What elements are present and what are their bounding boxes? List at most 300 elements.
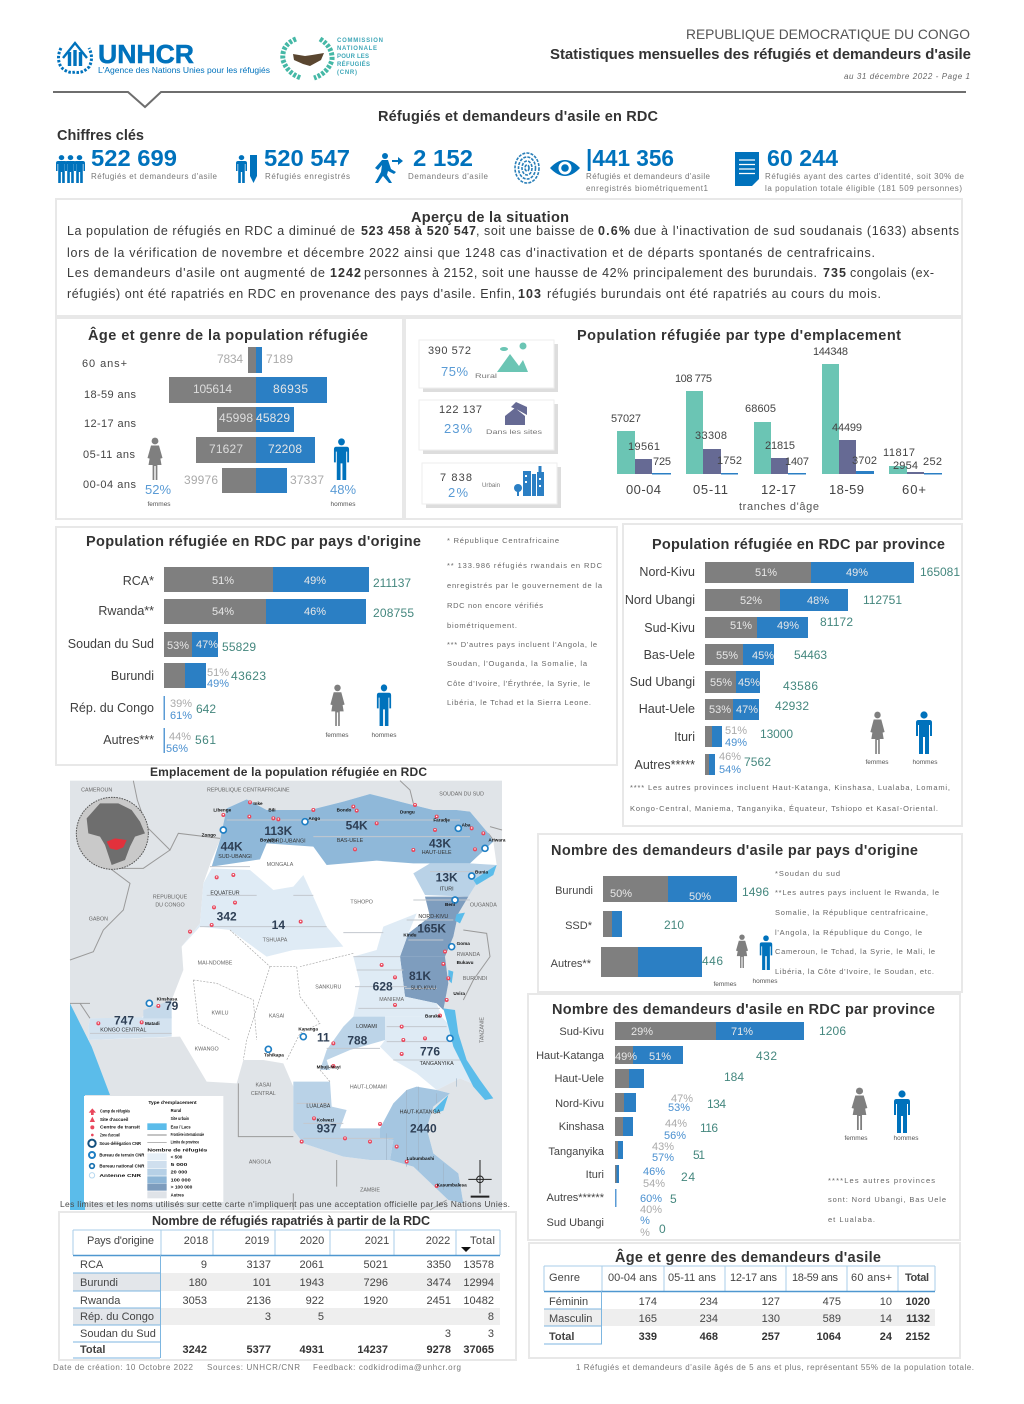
table: asylum seekers: Féminin bbox=[549, 1296, 588, 1308]
chart: origin bars: Autres*** bbox=[103, 733, 154, 747]
table: repatriations: 3474 bbox=[427, 1277, 451, 1289]
refugee count labels: 165K bbox=[417, 921, 446, 935]
text block: asylum origin notes: Somalie, la République centrafricaine, bbox=[775, 908, 928, 917]
provinces: Haut-Katanga bbox=[380, 1087, 463, 1203]
kpi: asylum seekers: Demandeurs d'asile bbox=[408, 172, 489, 181]
card: sites bbox=[419, 400, 558, 454]
kpi: identity cards: 60 244 bbox=[767, 145, 838, 171]
card: rural: 75% bbox=[441, 364, 468, 379]
logo: UNHCR: L'Agence des Nations Unies pour les réfugiés bbox=[98, 66, 270, 75]
text block: origin notes: Soudan, l'Ouganda, la Somalie, la bbox=[447, 659, 588, 668]
chart: province bars: 13000 bbox=[760, 727, 793, 741]
kpi: identity cards bbox=[735, 145, 965, 193]
chart: clustered bars by age: 11817 bbox=[883, 447, 915, 459]
chart: asylum origin bars bbox=[551, 876, 769, 977]
kpi: asylum seekers bbox=[375, 145, 489, 183]
icon: women bbox=[148, 438, 162, 480]
heading: map title: Emplacement de la population réfugiée en RDC bbox=[150, 765, 427, 779]
town name labels: Libenge bbox=[213, 808, 232, 813]
text block: origin notes bbox=[447, 536, 603, 707]
table: asylum seekers: 589 bbox=[823, 1313, 841, 1325]
text block: situation paragraph: 0.6% bbox=[598, 224, 630, 238]
country and province labels: KASAI bbox=[255, 1083, 271, 1089]
table: repatriations: 8 bbox=[488, 1311, 494, 1323]
chart: population pyramid: 71627 bbox=[209, 442, 243, 456]
chart: asylum origin bars: 50% bbox=[610, 888, 632, 900]
country and province labels: LUALABA bbox=[306, 1103, 331, 1109]
table: asylum seekers: Genre bbox=[549, 1272, 580, 1284]
provinces: Maniema and north Tanganyika bbox=[353, 957, 442, 1017]
table: asylum seekers: 14 bbox=[880, 1313, 892, 1325]
provinces: Lualaba bbox=[293, 1082, 393, 1160]
map legend: Bureau de terrain CNR bbox=[99, 1153, 145, 1159]
chart: origin bars: 43623 bbox=[231, 669, 266, 683]
text block: asylum origin notes: **Les autres pays incluent le Rwanda, le bbox=[775, 888, 939, 897]
country and province labels: TANZANIE bbox=[479, 1017, 485, 1043]
icon: women: femmes bbox=[865, 759, 889, 766]
chart: clustered bars by age: 2954 bbox=[893, 460, 918, 472]
chart: province bars: 49% bbox=[846, 567, 868, 579]
chart: origin bars: 39% bbox=[170, 698, 192, 710]
chart: province bars: 51% bbox=[725, 725, 747, 737]
chart: province bars: Nord Ubangi bbox=[625, 593, 695, 607]
chart: clustered bars by age: 12-17 bbox=[761, 482, 796, 497]
chart: asylum province bars: % bbox=[640, 1215, 650, 1227]
text block: asylum province notes: et Lualaba. bbox=[828, 1215, 875, 1224]
chart: asylum province bars: Sud-Kivu bbox=[559, 1026, 604, 1038]
table: asylum seekers: 234 bbox=[700, 1313, 718, 1325]
table: asylum seekers: 127 bbox=[762, 1296, 780, 1308]
chart: clustered bars by age: 108 775 bbox=[675, 373, 712, 385]
table: repatriations: 4931 bbox=[300, 1344, 324, 1356]
logo: CNR commission nationale pour les réfugiés: POUR LES bbox=[337, 54, 369, 60]
chart: asylum province bars: Haut-Katanga bbox=[536, 1050, 605, 1062]
map legend: Zone d'accueil bbox=[100, 1132, 120, 1138]
text block: province notes: Kongo-Central, Maniema, Tanganyika, Équateur, Tshiopo et Kasaï-Oriental. bbox=[630, 804, 938, 813]
chart: province bars: 45% bbox=[752, 650, 774, 662]
chart: asylum province bars: 1206 bbox=[819, 1024, 846, 1038]
chart: clustered bars by age: 3702 bbox=[852, 455, 877, 467]
chart: asylum province bars: 46% bbox=[643, 1166, 665, 1178]
town name labels: Lubumbashi bbox=[407, 1156, 434, 1161]
icon: fingerprint and eye bbox=[515, 153, 580, 183]
chart: asylum origin bars: 1496 bbox=[742, 885, 769, 899]
country and province labels: CENTRAL bbox=[251, 1091, 276, 1097]
text block: asylum province notes: ****Les autres provinces bbox=[828, 1176, 935, 1185]
table: repatriations: 5377 bbox=[247, 1344, 271, 1356]
inset globe bbox=[76, 797, 148, 869]
country and province labels: MAI-NDOMBE bbox=[198, 961, 233, 967]
text block: origin notes: Côte d'Ivoire, l'Érythrée, la Syrie, le bbox=[447, 679, 590, 688]
compass and scale bbox=[468, 1160, 492, 1197]
icon: women: femmes bbox=[713, 981, 737, 988]
chart: asylum province bars: 29% bbox=[631, 1026, 653, 1038]
panel: asylum seekers by country of origin bbox=[538, 834, 962, 992]
table: repatriations: 2022 bbox=[426, 1235, 450, 1247]
country and province labels: SOUDAN DU SUD bbox=[439, 791, 484, 797]
chart: origin bars: 561 bbox=[195, 733, 216, 747]
town name labels: Kinshasa bbox=[157, 997, 178, 1002]
map legend: Sous-délégation CNR bbox=[99, 1141, 141, 1147]
chart: province bars: 51% bbox=[755, 567, 777, 579]
text block: asylum origin notes: l'Angola, la République du Congo, le bbox=[775, 928, 922, 937]
chart: origin bars: 61% bbox=[170, 710, 192, 722]
table: asylum seekers: 1132 bbox=[906, 1313, 930, 1325]
country and province labels: KONGO CENTRAL bbox=[100, 1028, 146, 1034]
map legend: Type d'emplacement bbox=[148, 1100, 197, 1106]
table: repatriations: Rép. du Congo bbox=[80, 1311, 154, 1323]
icon: women: femmes bbox=[844, 1135, 868, 1142]
refugee count labels: 747 bbox=[114, 1014, 134, 1028]
chart: clustered bars by age: 725 bbox=[653, 456, 671, 468]
chart: asylum province bars: 40% bbox=[640, 1204, 662, 1216]
kpi: registered refugees bbox=[236, 145, 350, 183]
kpi: identity cards: la population totale éligible (181 509 personnes) bbox=[765, 184, 962, 193]
town name labels: Mbuji-Mayi bbox=[317, 1064, 341, 1069]
table: repatriations: 2451 bbox=[427, 1295, 451, 1307]
country and province labels: TANGANYIKA bbox=[420, 1061, 454, 1067]
men share: hommes bbox=[331, 501, 356, 508]
heading: Population réfugiée par type d'emplacement bbox=[577, 328, 901, 344]
table: asylum seekers: 165 bbox=[639, 1313, 657, 1325]
kpi: refugees and asylum seekers: Réfugiés et demandeurs d'asile bbox=[91, 172, 218, 181]
town name labels: Boyabu bbox=[260, 838, 277, 843]
table: asylum seekers bbox=[544, 1266, 935, 1344]
text block: asylum province notes bbox=[828, 1176, 946, 1224]
chart: origin bars: 642 bbox=[196, 702, 216, 716]
heading: Âge et genre des demandeurs d'asile bbox=[615, 1248, 881, 1266]
text block: origin notes: biométriquement. bbox=[447, 621, 517, 630]
logo: CNR commission nationale pour les réfugiés: RÉFUGIÉS bbox=[337, 60, 370, 68]
table: asylum seekers: 475 bbox=[823, 1296, 841, 1308]
text block: province notes: **** Les autres provinces incluent Haut-Katanga, Kinshasa, Lualaba, Lomami, bbox=[630, 783, 950, 792]
town name labels: Kindu bbox=[403, 933, 417, 938]
men share bbox=[330, 482, 356, 508]
kpi: biometrically registered bbox=[515, 145, 711, 193]
table: repatriations: 3242 bbox=[183, 1344, 207, 1356]
provinces: Kinshasa bbox=[143, 1000, 172, 1018]
refugee count labels: 13K bbox=[436, 870, 458, 884]
table: repatriations: 12994 bbox=[463, 1277, 494, 1289]
chart: clustered bars by age: 33308 bbox=[695, 430, 727, 442]
map legend: Bureau national CNR bbox=[99, 1164, 145, 1170]
refugee count labels: 44K bbox=[221, 840, 243, 854]
chart: province bars: 55% bbox=[710, 677, 732, 689]
heading: Nombre de réfugiés rapatriés à partir de la RDC bbox=[152, 1214, 430, 1228]
table: repatriations: 5021 bbox=[364, 1259, 388, 1271]
panel: repatriated refugees bbox=[59, 1212, 516, 1360]
text block: asylum origin notes bbox=[775, 869, 939, 976]
chart: asylum origin bars: 446 bbox=[702, 954, 723, 968]
horizontal stripe artefacts bbox=[90, 820, 477, 1138]
country and province labels bbox=[81, 787, 497, 1194]
chart: origin bars: 56% bbox=[166, 743, 188, 755]
footer: credits: Sources: UNHCR/CNR bbox=[207, 1363, 300, 1372]
table: repatriations: 3 bbox=[265, 1311, 271, 1323]
icon: three people bbox=[56, 155, 85, 183]
men share: 48% bbox=[330, 482, 356, 497]
chart: asylum province bars: % bbox=[640, 1227, 650, 1239]
text block: asylum origin notes: Cameroun, le Tchad, la Syrie, le Mali, le bbox=[775, 947, 935, 956]
chart: province bars: Ituri bbox=[674, 730, 695, 744]
text block: origin notes: Libéria, le Tchad et la Sierra Leone. bbox=[447, 698, 591, 707]
DRC base land bbox=[88, 794, 497, 1203]
kpi: biometrically registered: |441 356 bbox=[586, 145, 674, 171]
icon: women bbox=[865, 712, 889, 766]
panel: refugees by country of origin bbox=[56, 527, 617, 765]
table: asylum seekers: 1020 bbox=[906, 1296, 930, 1308]
provinces: Sud-Kivu bbox=[400, 957, 448, 1010]
town name labels: Bili bbox=[268, 808, 276, 813]
chart: province bars: Haut-Uele bbox=[639, 702, 695, 716]
chart: province bars: 54463 bbox=[794, 648, 827, 662]
chart: population pyramid: 18-59 ans bbox=[84, 389, 136, 401]
town name labels: Zongo bbox=[202, 833, 216, 838]
refugee count labels: 113K bbox=[264, 824, 293, 838]
chart: province bars: 81172 bbox=[820, 615, 853, 629]
chart: province bars: 46% bbox=[719, 751, 741, 763]
table: repatriations bbox=[73, 1230, 500, 1358]
heading: Population réfugiée en RDC par pays d'origine bbox=[86, 534, 421, 550]
kpi: refugees and asylum seekers: 522 699 bbox=[91, 145, 177, 171]
chart: asylum province bars: 53% bbox=[668, 1102, 690, 1114]
chart: province bars: 49% bbox=[725, 737, 747, 749]
logo: UNHCR bbox=[58, 39, 270, 75]
chart: asylum province bars: Tanganyika bbox=[548, 1146, 605, 1158]
table: asylum seekers: 24 bbox=[880, 1331, 893, 1343]
map: refugee locations in DRC bbox=[70, 781, 506, 1210]
refugee count labels: 342 bbox=[217, 910, 237, 924]
refugee count labels: 43K bbox=[429, 836, 451, 850]
table: repatriations: 37065 bbox=[463, 1344, 494, 1356]
table: repatriations: Burundi bbox=[80, 1277, 118, 1289]
country and province labels: HAUT-UELE bbox=[422, 850, 452, 856]
icon: men bbox=[913, 711, 938, 766]
provinces: Tanganyika bbox=[380, 1017, 480, 1090]
chart: asylum province bars: 134 bbox=[707, 1097, 726, 1111]
country and province labels: ANGOLA bbox=[249, 1159, 272, 1165]
provinces: Lomami bbox=[320, 1017, 385, 1070]
card: urban: 2% bbox=[448, 485, 468, 500]
chart: origin bars: 46% bbox=[304, 606, 326, 618]
map legend: Site d'accueil bbox=[100, 1117, 129, 1123]
town name labels bbox=[145, 801, 506, 1188]
chart: clustered bars by age: 144348 bbox=[813, 346, 848, 358]
text block: asylum province notes: sont: Nord Ubangi, Bas Uele bbox=[828, 1195, 946, 1204]
country and province labels: REPUBLIQUE bbox=[153, 894, 188, 900]
map legend: Nombre de réfugiés bbox=[147, 1148, 208, 1154]
chart: clustered bars by age: 252 bbox=[923, 456, 942, 468]
chart: asylum province bars: Haut-Uele bbox=[554, 1073, 604, 1085]
country and province labels: KWILU bbox=[212, 1011, 229, 1017]
chart: clustered bars by age: 44499 bbox=[832, 422, 862, 434]
report title block: REPUBLIQUE DEMOCRATIQUE DU CONGO bbox=[686, 26, 970, 42]
country and province labels: GABON bbox=[89, 917, 108, 923]
map legend: 100 000 bbox=[171, 1177, 191, 1183]
card: rural: 390 572 bbox=[428, 345, 471, 357]
town name labels: Ariwara bbox=[488, 838, 506, 843]
text block: situation paragraph: 523 458 à 520 547 bbox=[361, 224, 476, 238]
chart: province bars: 42932 bbox=[775, 699, 809, 713]
chart: asylum origin bars: SSD* bbox=[565, 920, 593, 932]
chart: asylum province bars: Kinshasa bbox=[559, 1121, 605, 1133]
chart: asylum province bars: 51 bbox=[693, 1148, 705, 1162]
refugee location markers bbox=[96, 800, 488, 1188]
panel: asylum seekers by province bbox=[528, 994, 960, 1240]
table: repatriations: 922 bbox=[306, 1295, 324, 1307]
chart: asylum province bars bbox=[536, 1022, 846, 1239]
card: rural: Rural bbox=[475, 373, 498, 380]
icon: houses bbox=[505, 402, 527, 425]
table: asylum seekers: 468 bbox=[700, 1331, 718, 1343]
table: asylum seekers: 257 bbox=[762, 1331, 780, 1343]
town name labels: Kolwezi bbox=[317, 1118, 334, 1123]
text block: situation paragraph: due à l'inactivation de sud soudanais (1633) absents bbox=[634, 224, 959, 238]
chart: origin bars: Soudan du Sud bbox=[68, 637, 154, 651]
icon: mountains bbox=[497, 342, 528, 372]
text block: situation paragraph: personnes à 2152, soit une hausse de 42% principalement des burundais. bbox=[364, 266, 817, 280]
panel: age and gender of asylum seekers bbox=[529, 1243, 960, 1358]
table: repatriations: Total bbox=[80, 1344, 105, 1356]
card: sites: 23% bbox=[444, 421, 472, 436]
kpi: refugees and asylum seekers bbox=[56, 145, 218, 183]
chart: clustered bars by age: 21815 bbox=[765, 440, 795, 452]
country and province labels: RWANDA bbox=[457, 952, 480, 958]
icon: men: hommes bbox=[913, 759, 938, 766]
chart: asylum province bars: 432 bbox=[756, 1049, 777, 1063]
provinces: northwest light bbox=[182, 868, 343, 957]
table: asylum seekers: 234 bbox=[700, 1296, 718, 1308]
provinces: Kongo Central bbox=[88, 1017, 172, 1040]
text block: situation paragraph: congolais (ex- bbox=[850, 266, 934, 280]
chart: clustered bars by age: 19561 bbox=[628, 441, 660, 453]
table: asylum seekers: Total bbox=[905, 1272, 929, 1284]
country and province labels: MANIEMA bbox=[379, 997, 405, 1003]
map legend: Autres bbox=[171, 1192, 184, 1198]
chart: clustered bars by age: 1407 bbox=[785, 456, 809, 468]
country and province labels: DU CONGO bbox=[155, 903, 185, 909]
text block: situation paragraph: La population de réfugiés en RDC a diminué de bbox=[67, 224, 355, 238]
map legend: Centre de transit bbox=[100, 1125, 140, 1131]
chart: population pyramid: 05-11 ans bbox=[83, 449, 136, 461]
chart: origin bars bbox=[68, 567, 414, 755]
table: repatriations: 101 bbox=[253, 1277, 271, 1289]
table: repatriations: 3350 bbox=[427, 1259, 451, 1271]
table: asylum seekers: 130 bbox=[762, 1313, 780, 1325]
table: asylum seekers: 12-17 ans bbox=[730, 1272, 778, 1284]
chart: province bars: Autres***** bbox=[635, 758, 695, 772]
country and province labels: NORD-KIVU bbox=[418, 914, 448, 920]
country and province labels: MONGALA bbox=[267, 862, 294, 868]
chart: province bars: Bas-Uele bbox=[644, 648, 695, 662]
map legend: Limite de province bbox=[171, 1139, 199, 1145]
country and province labels: CAMEROUN bbox=[81, 787, 112, 793]
icon: men bbox=[334, 438, 349, 480]
text block: situation paragraph: Les demandeurs d'asile ont augmenté de bbox=[67, 266, 325, 280]
country and province labels: EQUATEUR bbox=[210, 891, 240, 897]
chart: origin bars: Rép. du Congo bbox=[70, 701, 154, 715]
heading: Nombre des demandeurs d'asile par pays d'origine bbox=[551, 843, 918, 859]
refugee count labels: 788 bbox=[347, 1034, 368, 1048]
chart: population pyramid: 7189 bbox=[266, 352, 293, 366]
table: repatriations: 2019 bbox=[245, 1235, 269, 1247]
footer: credits: Feedback: codkidrodima@unhcr.org bbox=[313, 1363, 461, 1372]
heading: situation: Aperçu de la situation bbox=[411, 210, 569, 226]
chart: origin bars: 51% bbox=[207, 667, 229, 679]
chart: origin bars: Burundi bbox=[111, 669, 154, 683]
table: repatriations: 2020 bbox=[300, 1235, 324, 1247]
country and province labels: BAS-UELE bbox=[337, 838, 364, 844]
town name labels: Tshikapa bbox=[264, 1053, 284, 1058]
town name labels: Inke bbox=[253, 801, 263, 806]
town name labels: Aba bbox=[462, 823, 471, 828]
chart: population pyramid: 60 ans+ bbox=[82, 358, 127, 370]
chart: clustered bars by age bbox=[611, 346, 942, 513]
women share bbox=[145, 482, 171, 508]
text block: situation paragraph: 735 bbox=[823, 266, 846, 280]
chart: province bars: 47% bbox=[736, 704, 758, 716]
logo: UNHCR: UNHCR bbox=[98, 39, 194, 69]
map legend: 20 000 bbox=[171, 1170, 188, 1176]
chart: population pyramid: 45829 bbox=[256, 411, 290, 425]
table: asylum seekers: 10 bbox=[880, 1296, 892, 1308]
chart: province bars: 48% bbox=[807, 595, 829, 607]
chart: province bars: 54% bbox=[719, 764, 741, 776]
chart: asylum province bars: 116 bbox=[700, 1121, 718, 1135]
chart: population pyramid: 45998 bbox=[219, 411, 253, 425]
text block: asylum origin notes: *Soudan du sud bbox=[775, 869, 840, 878]
text block: province notes bbox=[630, 783, 950, 813]
table: repatriations: 2136 bbox=[247, 1295, 271, 1307]
map legend: Frontière internationale bbox=[171, 1132, 204, 1138]
chart: province bars: Sud-Kivu bbox=[644, 621, 695, 635]
refugee count labels: 2440 bbox=[410, 1121, 437, 1135]
chart: province bars: 43586 bbox=[783, 679, 818, 693]
heading: main subtitle: Réfugiés et demandeurs d'asile en RDC bbox=[378, 109, 659, 125]
chart: clustered bars by age: 05-11 bbox=[693, 482, 728, 497]
country and province labels: ITURI bbox=[440, 887, 454, 893]
table: asylum seekers: 174 bbox=[639, 1296, 657, 1308]
table: repatriations: 3 bbox=[445, 1328, 451, 1340]
chart: origin bars: 211137 bbox=[373, 576, 411, 590]
refugee count labels: 628 bbox=[373, 980, 393, 994]
table: asylum seekers: 00-04 ans bbox=[608, 1272, 658, 1284]
country and province labels: TSHUAPA bbox=[263, 938, 288, 944]
text block: situation paragraph: réfugiés burundais ont été rapatriés au cours du mois. bbox=[547, 287, 881, 301]
chart: origin bars: 51% bbox=[212, 575, 234, 587]
chart: province bars: 49% bbox=[777, 620, 799, 632]
country and province labels: TSHOPO bbox=[350, 899, 373, 905]
heading: Population réfugiée en RDC par province bbox=[652, 537, 945, 553]
icon: women bbox=[713, 934, 748, 988]
card: sites: 122 137 bbox=[439, 404, 482, 416]
table: repatriations: 9 bbox=[201, 1259, 207, 1271]
map legend: Antenne CNR bbox=[99, 1173, 142, 1179]
logo: CNR commission nationale pour les réfugiés: COMMISSION bbox=[337, 38, 383, 44]
report title block: Statistiques mensuelles des réfugiés et demandeurs d'asile bbox=[550, 46, 971, 63]
table: repatriations: 9278 bbox=[427, 1344, 451, 1356]
chart: province bars bbox=[625, 562, 960, 776]
chart: origin bars: RCA* bbox=[123, 574, 154, 588]
women share: 52% bbox=[145, 482, 171, 497]
table: asylum seekers: Total bbox=[549, 1331, 574, 1343]
panel: age and gender of refugee population bbox=[56, 318, 403, 519]
chart: asylum province bars: 5 bbox=[670, 1192, 677, 1206]
country and province labels: HAUT-KATANGA bbox=[400, 1109, 441, 1115]
map legend: Site urbain bbox=[171, 1116, 189, 1122]
country and province labels: SUD-KIVU bbox=[411, 985, 436, 991]
table: asylum seekers: 1064 bbox=[817, 1331, 842, 1343]
